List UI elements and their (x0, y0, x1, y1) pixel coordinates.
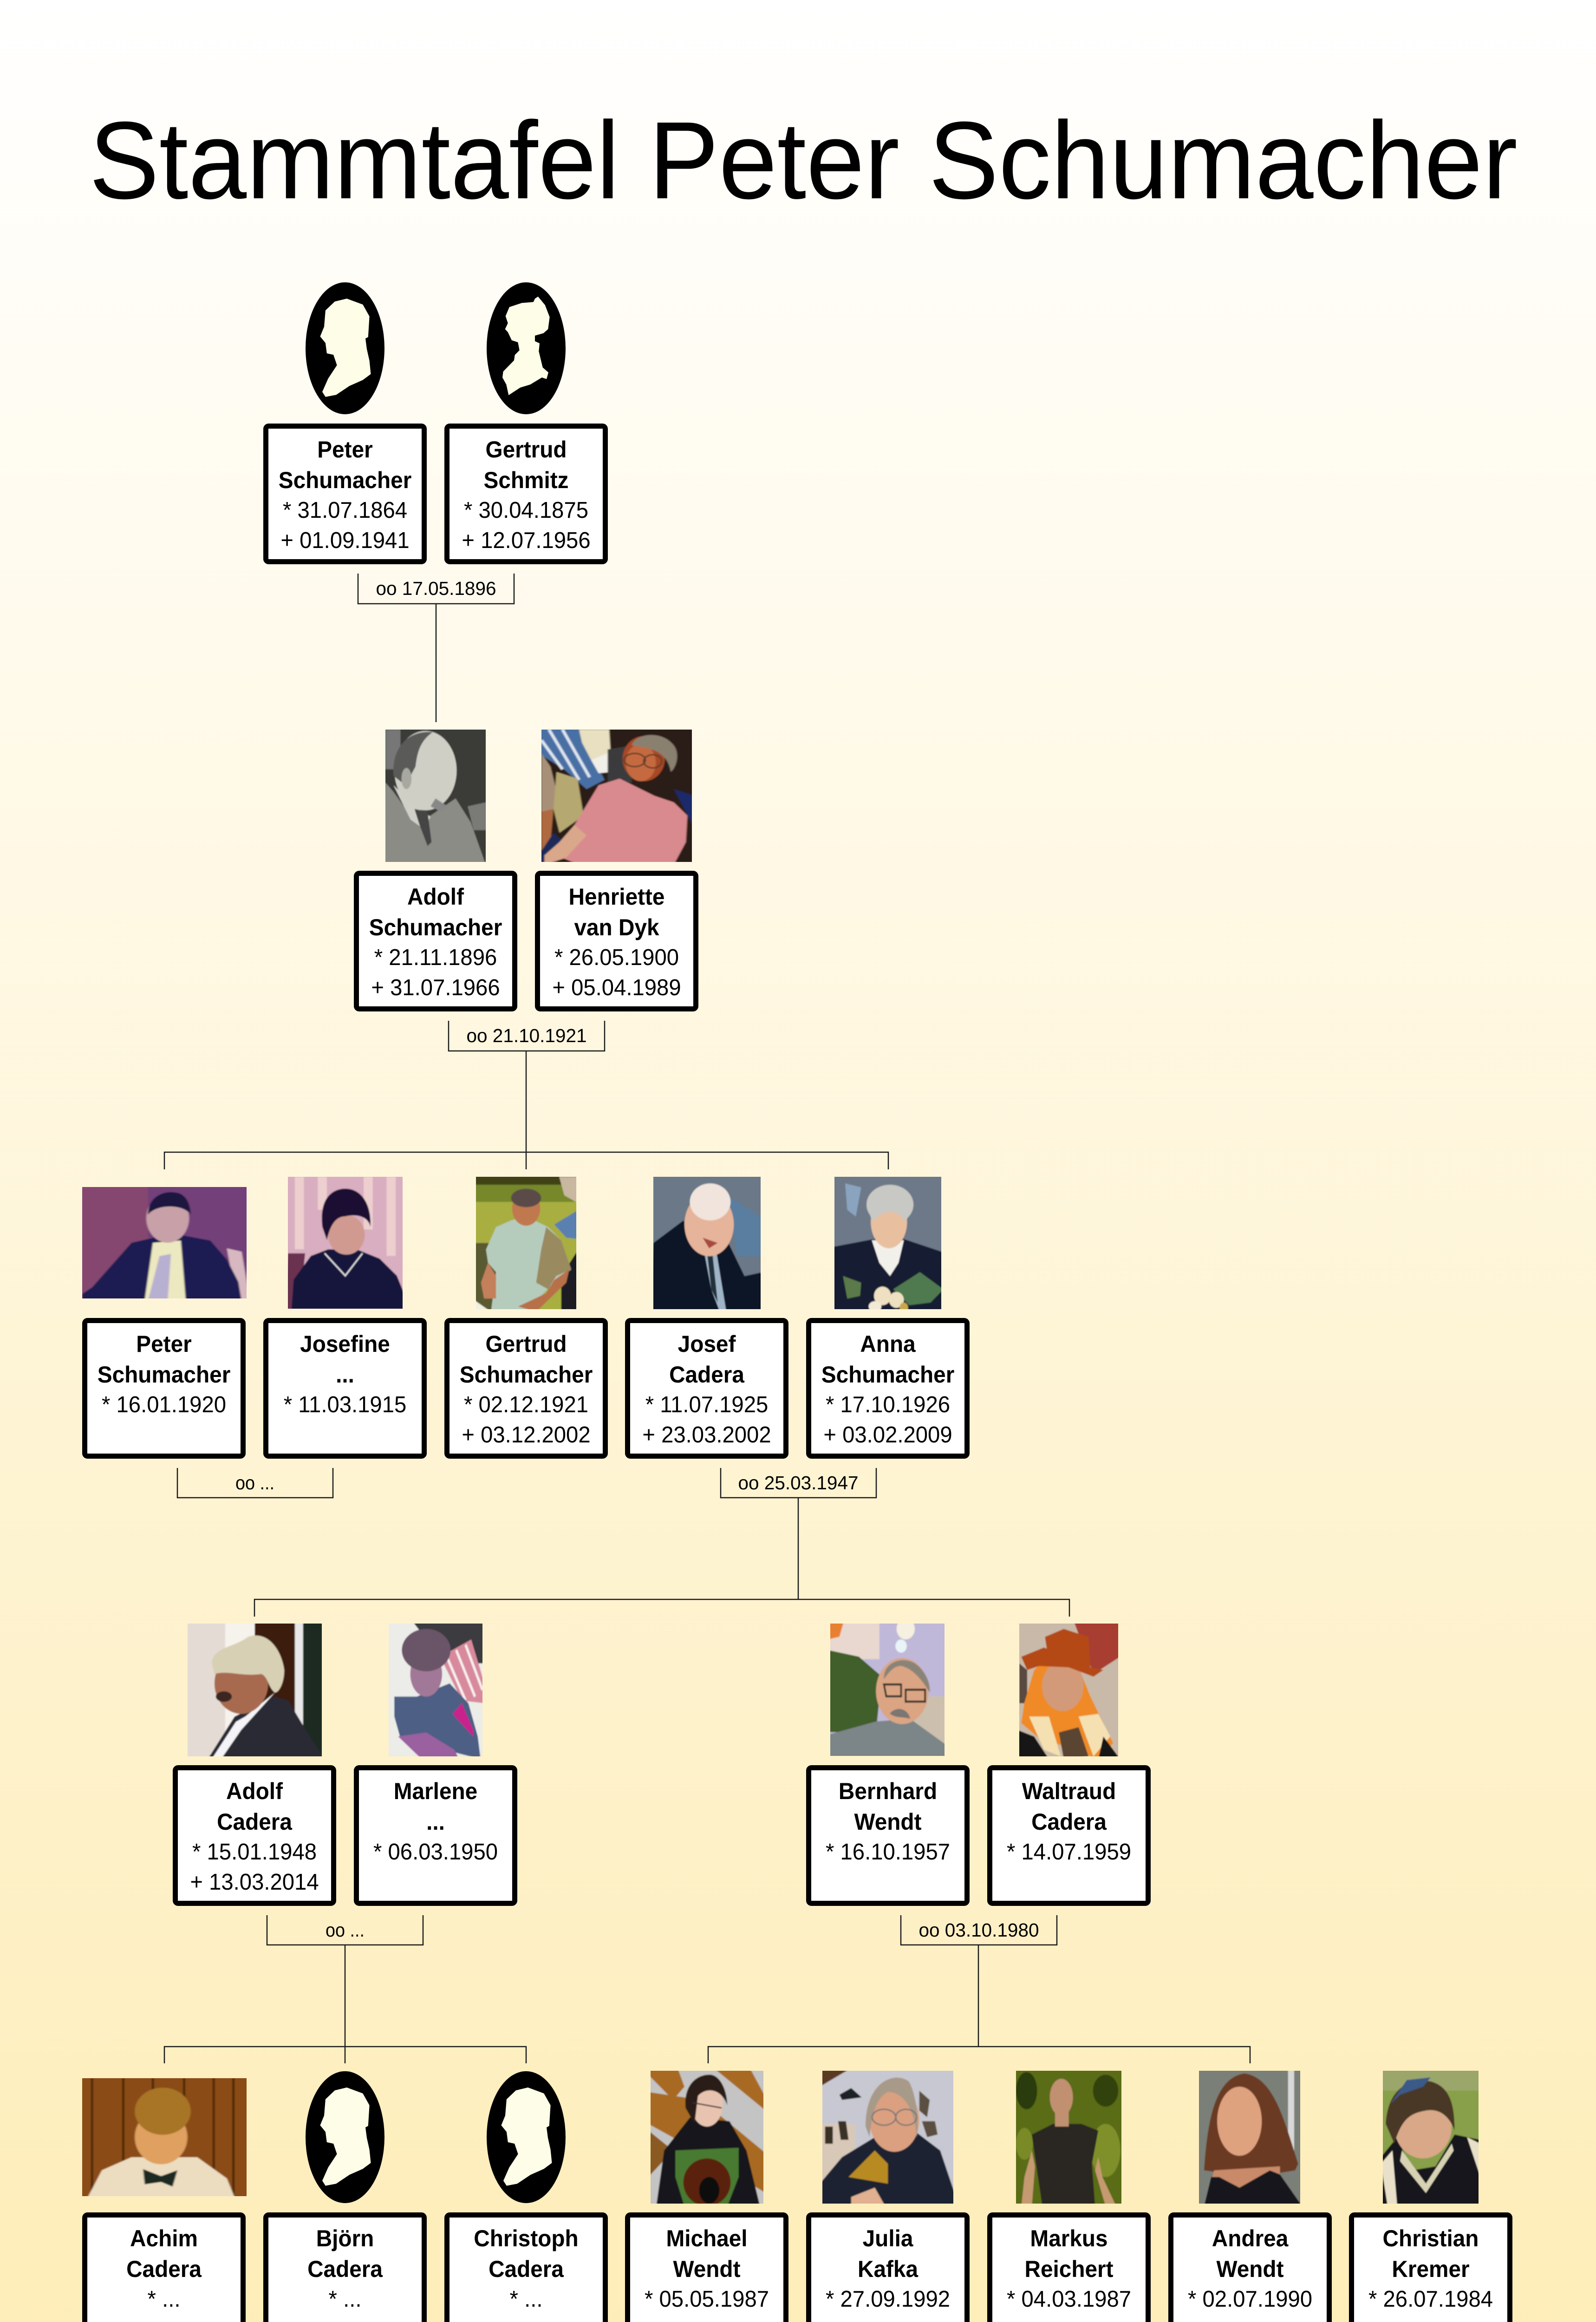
connector: Wendt children (708, 1945, 1250, 2063)
marriage bracket 17.05.1896: oo 17.05.1896 (376, 578, 496, 599)
card: * 14.07.1959 (1007, 1839, 1131, 1865)
card: * ... (148, 2286, 180, 2312)
marriage bracket 25.03.1947: oo 25.03.1947 (738, 1472, 858, 1494)
marriage bracket 03.10.1980 (901, 1915, 1057, 1945)
card (990, 1768, 1148, 1903)
marriage bracket oo ...: oo ... (235, 1472, 274, 1494)
card: Cadera (126, 2257, 202, 2282)
card: * 16.01.1920 (102, 1392, 226, 1417)
connector: generation 2 to 3 (164, 1051, 888, 1169)
person: Bernhard Wendt (809, 1611, 967, 1903)
card: Markus (1030, 2226, 1108, 2251)
card: Anna (860, 1331, 916, 1357)
card: + 23.03.2002 (642, 1422, 771, 1448)
card (538, 873, 696, 1009)
card: Cadera (669, 1362, 745, 1388)
card (1351, 2215, 1510, 2322)
card: Bernhard (839, 1779, 937, 1804)
card: Kafka (858, 2257, 919, 2282)
photo (66, 2067, 263, 2208)
icon: male silhouette (306, 2071, 384, 2203)
card: Cadera (217, 1809, 293, 1835)
card: * ... (510, 2286, 542, 2312)
photo (174, 1610, 335, 1770)
card: Christian (1383, 2226, 1479, 2251)
card: Cadera (307, 2257, 383, 2282)
photo (809, 2057, 966, 2217)
person: Peter Schumacher 1864 (266, 282, 424, 562)
card: Björn (316, 2226, 374, 2251)
card (628, 2215, 786, 2322)
marriage bracket 03.10.1980: oo 03.10.1980 (919, 1919, 1039, 1941)
card: * 06.03.1950 (373, 1839, 498, 1865)
card: Peter (317, 437, 373, 463)
person: Gertrud Schumacher (447, 1164, 606, 1456)
card: Josefine (300, 1331, 390, 1357)
card: * 27.09.1992 (826, 2286, 950, 2312)
photo (643, 1164, 771, 1323)
card: Peter (136, 1331, 192, 1357)
card: Gertrud (485, 437, 567, 463)
person: Michael Wendt (628, 2057, 786, 2322)
icon: female silhouette (487, 282, 566, 414)
card: Andrea (1212, 2226, 1289, 2251)
card (447, 2215, 606, 2322)
marriage bracket 25.03.1947 (721, 1468, 876, 1498)
card: Christoph (474, 2226, 579, 2251)
card: Cadera (1031, 1809, 1107, 1835)
photo (379, 1610, 492, 1770)
card: * 26.05.1900 (554, 945, 679, 970)
card: + 03.02.2009 (823, 1422, 952, 1448)
marriage bracket oo ... (177, 1468, 333, 1498)
card: + 03.12.2002 (462, 1422, 591, 1448)
card (85, 2215, 243, 2322)
card: Josef (678, 1331, 736, 1357)
person: Waltraud Cadera (990, 1610, 1148, 1903)
photo (1373, 2057, 1488, 2217)
card: + 05.04.1989 (552, 975, 681, 1000)
card: * 04.03.1987 (1007, 2286, 1131, 2312)
person: Andrea Wendt (1171, 2057, 1329, 2322)
photo (1010, 1610, 1128, 1770)
card: ... (336, 1362, 354, 1388)
marriage bracket 17.05.1896 (358, 574, 514, 604)
card: * 30.04.1875 (464, 497, 588, 523)
photo (527, 716, 707, 875)
card (809, 2215, 967, 2322)
person: Christoph Cadera (447, 2071, 606, 2322)
person: Marlene (357, 1610, 515, 1903)
photo (1189, 2057, 1310, 2217)
photo (276, 1164, 414, 1322)
card: + 13.03.2014 (190, 1869, 319, 1895)
marriage bracket oo ...: oo ... (326, 1919, 365, 1941)
card: * 02.07.1990 (1188, 2286, 1312, 2312)
photo (1005, 2057, 1132, 2217)
connector: Adolf Cadera children (164, 1945, 526, 2063)
icon: male silhouette (487, 2071, 566, 2203)
card: * 31.07.1864 (283, 497, 407, 523)
card: * 11.07.1925 (645, 1392, 768, 1417)
photo (639, 2057, 775, 2217)
card: * 15.01.1948 (192, 1839, 317, 1865)
card: Kremer (1392, 2257, 1470, 2282)
photo (66, 1176, 263, 1310)
photo (819, 1611, 956, 1769)
card: Wendt (1217, 2257, 1283, 2282)
person: Josefine (266, 1164, 424, 1456)
card: * 11.03.1915 (284, 1392, 406, 1417)
person: Anna Schumacher (809, 1164, 967, 1456)
card (85, 1321, 243, 1456)
icon: male silhouette (306, 282, 384, 414)
card (447, 1321, 606, 1456)
card (266, 2215, 424, 2322)
card: Schumacher (98, 1362, 230, 1388)
card (266, 426, 424, 562)
card (1171, 2215, 1329, 2322)
card (266, 1321, 424, 1456)
card: van Dyk (574, 915, 659, 940)
card: * 02.12.1921 (464, 1392, 588, 1417)
title: Stammtafel Peter Schumacher (89, 99, 1518, 222)
card (176, 1768, 333, 1903)
card: Reichert (1024, 2257, 1114, 2282)
card: Adolf (407, 884, 464, 910)
card: ... (426, 1809, 445, 1835)
card: Adolf (226, 1779, 283, 1804)
marriage bracket oo ... (267, 1915, 423, 1945)
photo (824, 1164, 952, 1323)
card: * 16.10.1957 (826, 1839, 950, 1865)
person: Christian Kremer (1351, 2057, 1510, 2322)
card: Waltraud (1022, 1779, 1116, 1804)
card (447, 426, 606, 562)
card: Schmitz (483, 468, 569, 493)
photo (466, 1164, 586, 1323)
card: Henriette (569, 884, 664, 910)
card: + 31.07.1966 (371, 975, 500, 1000)
marriage bracket 21.10.1921: oo 21.10.1921 (466, 1025, 587, 1046)
photo (375, 716, 496, 875)
person: Josef Cadera (628, 1164, 786, 1456)
card: * 26.07.1984 (1368, 2286, 1493, 2312)
card (357, 1768, 515, 1903)
card (990, 2215, 1148, 2322)
person: Adolf Cadera (174, 1610, 335, 1903)
card: * 17.10.1926 (826, 1392, 950, 1417)
person: Gertrud Schmitz (447, 282, 606, 562)
card: Marlene (394, 1779, 477, 1804)
card: Cadera (489, 2257, 564, 2282)
card: * 05.05.1987 (645, 2286, 769, 2312)
card: Schumacher (279, 468, 411, 493)
card: Wendt (673, 2257, 740, 2282)
card: + 12.07.1956 (462, 528, 591, 553)
person: Peter Schumacher 1920 (66, 1176, 263, 1456)
card: + 01.09.1941 (280, 528, 410, 553)
card (809, 1768, 967, 1903)
card: * ... (329, 2286, 361, 2312)
card: Julia (863, 2226, 913, 2251)
card: Schumacher (369, 915, 502, 940)
card (628, 1321, 786, 1456)
card (809, 1321, 967, 1456)
person: Adolf Schumacher (357, 716, 707, 1009)
person: Björn Cadera (266, 2071, 424, 2322)
marriage bracket 21.10.1921 (449, 1021, 605, 1051)
person: Julia Kafka (809, 2057, 967, 2322)
connector: generation 3 to 4 (254, 1498, 1069, 1617)
person: Markus Reichert (990, 2057, 1148, 2322)
card: * 21.11.1896 (374, 945, 497, 970)
card: Michael (666, 2226, 748, 2251)
card: Gertrud (485, 1331, 567, 1357)
person: Achim Cadera (66, 2067, 263, 2322)
card (357, 873, 515, 1009)
card: Wendt (854, 1809, 921, 1835)
card: Achim (130, 2226, 198, 2251)
card: Schumacher (460, 1362, 593, 1388)
card: Schumacher (821, 1362, 954, 1388)
